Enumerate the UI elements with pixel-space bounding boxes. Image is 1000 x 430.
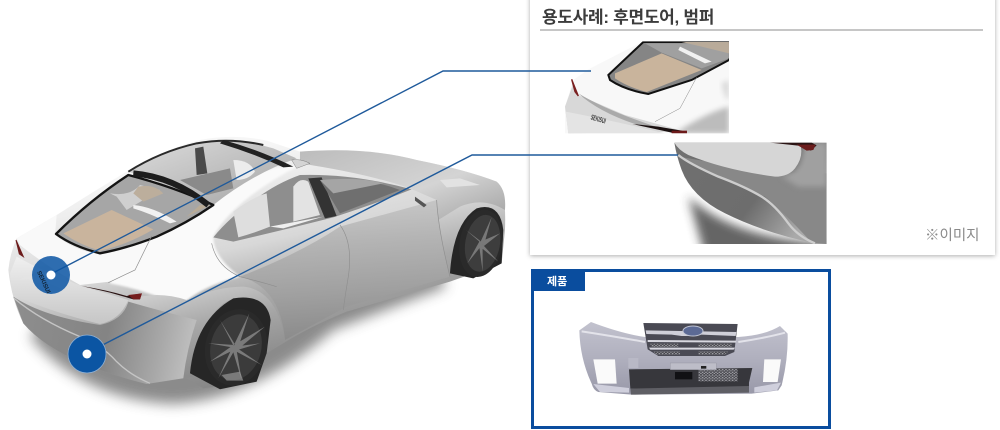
car body — [8, 137, 505, 388]
roof arch — [133, 173, 208, 205]
seats and interior — [180, 168, 233, 195]
rear bumper — [13, 297, 197, 384]
label: product tag: 제품 — [547, 274, 567, 288]
photo: rear door close-up — [564, 41, 729, 133]
heading: usage example title: 용도사례: 후면도어, 범퍼 — [542, 8, 714, 27]
marker: rear door — [32, 256, 70, 295]
door handle — [415, 197, 427, 207]
roof glass — [128, 141, 297, 205]
tan load floor — [63, 210, 153, 251]
panel: usage example — [530, 0, 995, 257]
panel: product — [532, 270, 830, 428]
car illustration — [8, 137, 508, 404]
hood — [300, 150, 505, 220]
logo: vehicle badge: SEKISUI — [590, 113, 607, 125]
marker: bumper — [68, 335, 106, 373]
rear deck — [17, 215, 153, 285]
side window — [213, 175, 412, 242]
rear quarter white highlight — [110, 165, 300, 307]
rear fender — [117, 287, 285, 384]
callout: rear door leader line — [51, 71, 591, 274]
car shadow — [30, 263, 447, 404]
rear wheel — [190, 298, 275, 392]
front wheel — [450, 206, 508, 281]
photo: bumper close-up — [674, 142, 827, 244]
trunk lower panel — [10, 257, 128, 324]
photo: front bumper — [579, 322, 788, 395]
roof pillar — [195, 147, 207, 175]
callout: bumper leader line — [87, 155, 678, 353]
caption: image note: ※이미지 — [925, 227, 980, 244]
tail lights — [82, 286, 142, 299]
marker: rear door: SEKISUI — [35, 270, 51, 295]
door seams — [212, 200, 450, 310]
door side panel — [240, 200, 450, 340]
label: product tag — [534, 272, 585, 291]
rear window — [56, 175, 213, 253]
